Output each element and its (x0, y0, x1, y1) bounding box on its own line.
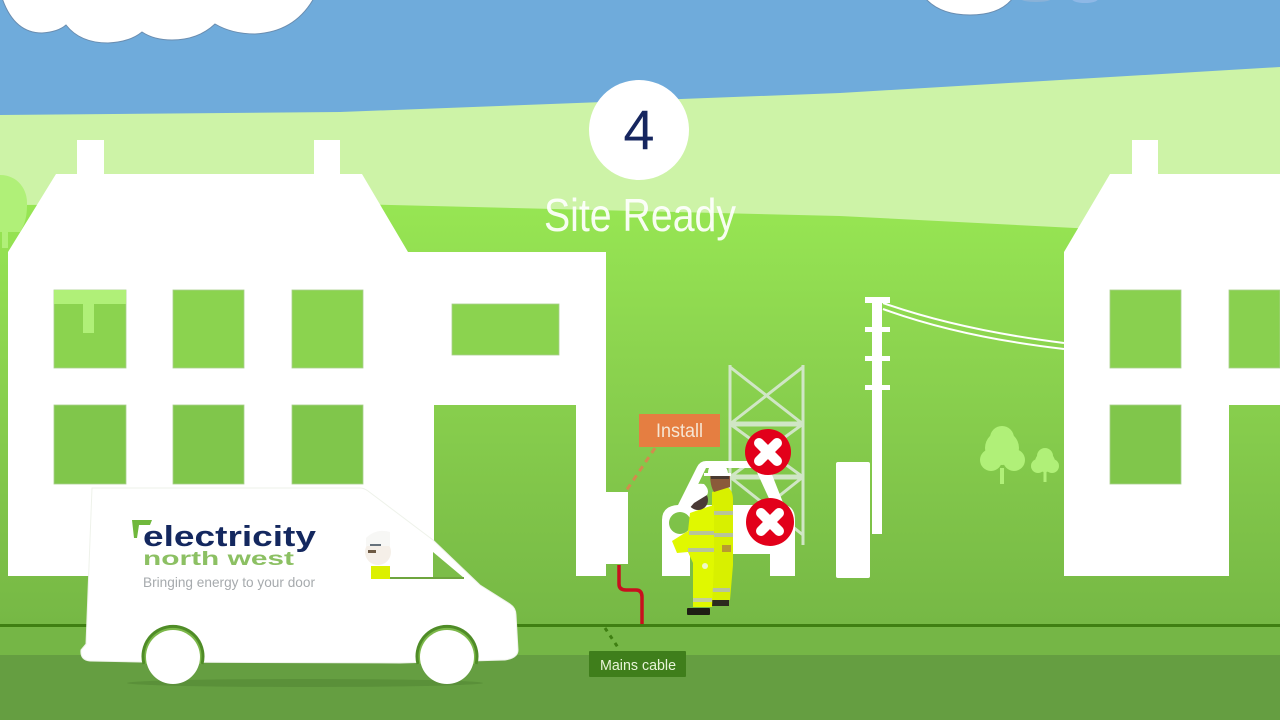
right house (1064, 140, 1280, 576)
windows: left house (54, 290, 559, 484)
trees: right (980, 426, 1059, 484)
road verge (0, 628, 1280, 655)
green field (0, 204, 1280, 655)
label: Install (639, 414, 720, 447)
warning: red cross upper (745, 429, 791, 475)
warning: red cross lower (746, 498, 794, 546)
install leader line (626, 448, 655, 491)
tree seen through window (54, 290, 126, 333)
van wheel arches (143, 626, 203, 664)
vehicle: small white car (662, 461, 795, 576)
label: Install: Install (656, 421, 703, 442)
van window (433, 552, 464, 578)
step badge (589, 80, 689, 180)
cloud: top left (2, 0, 314, 43)
van logo (132, 520, 316, 590)
electricity pole (865, 297, 890, 534)
title: Site Ready (544, 189, 736, 241)
scaffold tower (730, 365, 803, 545)
label: Mains cable: Mains cable (600, 657, 676, 674)
van shadow (127, 679, 483, 687)
underground cable line (0, 624, 1280, 627)
far hill (0, 67, 1280, 260)
left house (8, 140, 606, 576)
meter box (606, 492, 628, 564)
overhead wires (883, 303, 1064, 349)
installer: rear worker (672, 484, 714, 615)
sky (0, 0, 1280, 130)
installer: front worker (704, 464, 733, 606)
tree: behind left house (0, 175, 27, 248)
mains cable leader line (605, 628, 619, 649)
feeder pillar (836, 462, 870, 578)
van wheels (146, 630, 200, 684)
cloud: top right (925, 0, 1098, 15)
road (0, 655, 1280, 720)
van logo: electricity (143, 521, 316, 553)
step badge: 4 (623, 98, 655, 161)
van (81, 488, 518, 684)
van driver (365, 531, 391, 579)
van logo: north west (143, 549, 295, 570)
van logo: Bringing energy to your door (143, 574, 315, 590)
red service cable (619, 565, 642, 624)
windows: right house (1110, 290, 1280, 484)
label: Mains cable (589, 651, 686, 677)
